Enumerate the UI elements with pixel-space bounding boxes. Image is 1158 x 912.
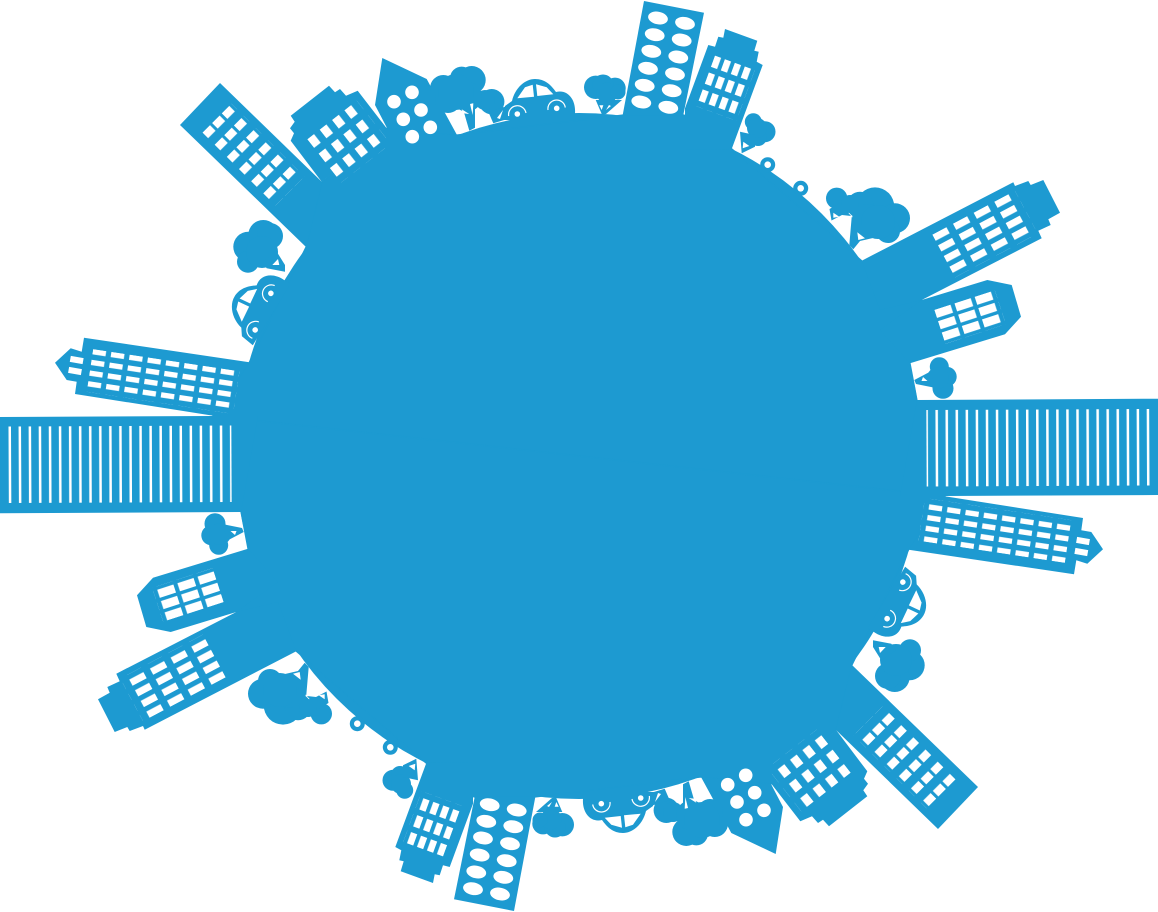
tree: bottom centre (mirror) [532, 798, 574, 838]
car: bottom (mirror) [583, 792, 655, 833]
building: tall block lower right (mirror) [836, 665, 978, 829]
car: top [503, 79, 575, 120]
building: long block right (mirror) [909, 496, 1103, 574]
tree: large bottom right (mirror) [672, 781, 728, 846]
car: right (mirror) [868, 567, 940, 650]
wheel: small upper right [793, 181, 808, 196]
building: oval window tower bottom (mirror) [454, 797, 535, 911]
building: oval window tower top [623, 1, 704, 115]
building: round window block bottom (mirror) [701, 768, 783, 854]
tree: right (mirror) [873, 639, 925, 692]
wheel: small lower left second (mirror) [383, 740, 398, 755]
building: pointed roof block right [880, 280, 1021, 363]
building: tall striped tower right [900, 399, 1158, 496]
building: stepped block lower right (mirror) [767, 729, 868, 826]
building: stepped tower top [685, 29, 763, 150]
wheel: small upper right second [760, 157, 775, 172]
tree: near bottom tower (mirror) [382, 759, 418, 799]
building: stepped block upper left [290, 86, 391, 183]
building: round window block [375, 58, 457, 144]
tree: right cluster small [914, 357, 957, 399]
building: stepped tower lower left (mirror) [98, 602, 296, 732]
car: left [218, 262, 290, 345]
building: pointed roof block lower left (mirror) [137, 549, 278, 632]
tree: top centre [584, 74, 626, 114]
tree: double tree upper right [826, 187, 910, 249]
building: tall striped tower left (mirror) [0, 416, 258, 513]
tree: near top tower [740, 113, 776, 153]
tree: left small (mirror) [201, 513, 244, 555]
tree: left [233, 220, 285, 273]
building: long block left [55, 338, 249, 416]
tree: large top left [430, 66, 486, 131]
building: stepped tower upper right [862, 180, 1060, 310]
wheel: small lower left (mirror) [350, 716, 365, 731]
building: stepped tower bottom (mirror) [395, 762, 473, 883]
planet disc [213, 113, 945, 799]
tree: double tree lower left (mirror) [248, 663, 332, 725]
tree: small beside car [475, 89, 507, 123]
tree: small beside bottom car (mirror) [651, 789, 683, 823]
building: tall block upper left [180, 83, 322, 247]
